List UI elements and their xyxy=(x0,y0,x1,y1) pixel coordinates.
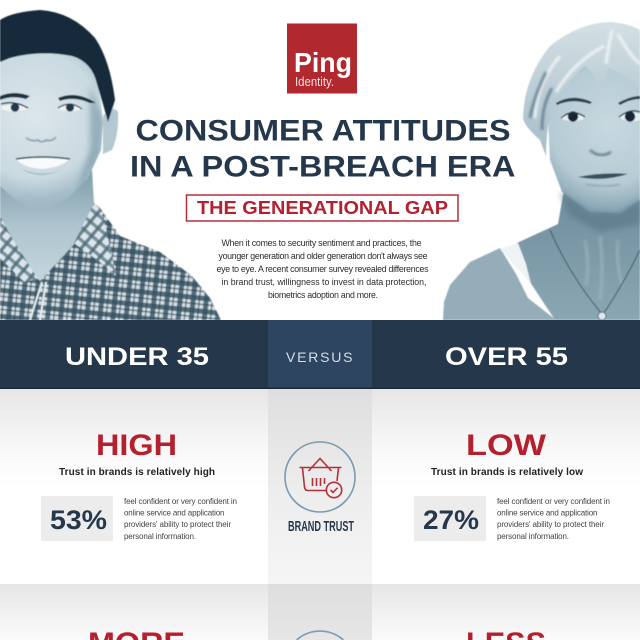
title: IN A POST-BREACH ERA xyxy=(130,150,516,184)
stat description: over 55 xyxy=(497,497,610,541)
intro paragraph: younger generation and older generation don't always see xyxy=(218,251,428,261)
band label: under 35: UNDER 35 xyxy=(65,343,209,371)
band label: over 55: OVER 55 xyxy=(445,343,568,371)
subheading: over 55 trust: Trust in brands is relatively low xyxy=(431,467,583,478)
icon label: brand trust: BRAND TRUST xyxy=(288,518,354,535)
row: brand trust xyxy=(0,389,640,584)
subheading: under 35 trust: Trust in brands is relatively high xyxy=(59,467,215,478)
stat description: under 35 xyxy=(124,497,237,541)
stat: 27% xyxy=(414,496,486,541)
header band xyxy=(0,320,640,389)
photo: older woman xyxy=(443,22,640,320)
intro paragraph: in brand trust, willingness to invest in data protection, xyxy=(222,277,426,287)
stat description: under 35: feel confident or very confident in xyxy=(124,497,237,506)
stat description: over 55: online service and application xyxy=(497,508,598,518)
stat: 53%: 53% xyxy=(50,505,107,535)
stat: 27%: 27% xyxy=(423,505,479,535)
intro paragraph xyxy=(216,238,429,300)
stat description: under 35: online service and application xyxy=(124,508,224,518)
logo: Ping Identity: Identity. xyxy=(295,74,334,89)
subtitle: the generational gap: THE GENERATIONAL GAP xyxy=(197,198,448,218)
stat description: under 35: providers' ability to protect their xyxy=(124,520,231,529)
stat description: over 55: providers' ability to protect their xyxy=(497,520,604,529)
title xyxy=(130,114,516,184)
intro paragraph: When it comes to security sentiment and practices, the xyxy=(222,238,422,248)
stat description: under 35: personal information. xyxy=(124,532,196,541)
row: next comparison (cropped) xyxy=(0,584,640,640)
subtitle: the generational gap xyxy=(186,195,458,221)
photo: young man xyxy=(0,10,221,320)
band label: versus: VERSUS xyxy=(286,349,352,365)
logo: Ping Identity: Ping xyxy=(294,47,352,78)
intro paragraph: eye to eye. A recent consumer survey revealed differences xyxy=(216,264,429,274)
icon: shopping basket with check xyxy=(285,442,355,512)
intro paragraph: biometrics adoption and more. xyxy=(268,290,378,300)
stat description: over 55: personal information. xyxy=(497,532,569,541)
logo: Ping Identity xyxy=(287,24,357,94)
heading: high: HIGH xyxy=(96,429,177,462)
stat: 53% xyxy=(41,496,113,541)
icon circle (cropped) xyxy=(297,631,343,640)
title: CONSUMER ATTITUDES xyxy=(136,114,510,148)
stat description: over 55: feel confident or very confident in xyxy=(497,497,610,506)
heading: low: LOW xyxy=(466,429,547,462)
